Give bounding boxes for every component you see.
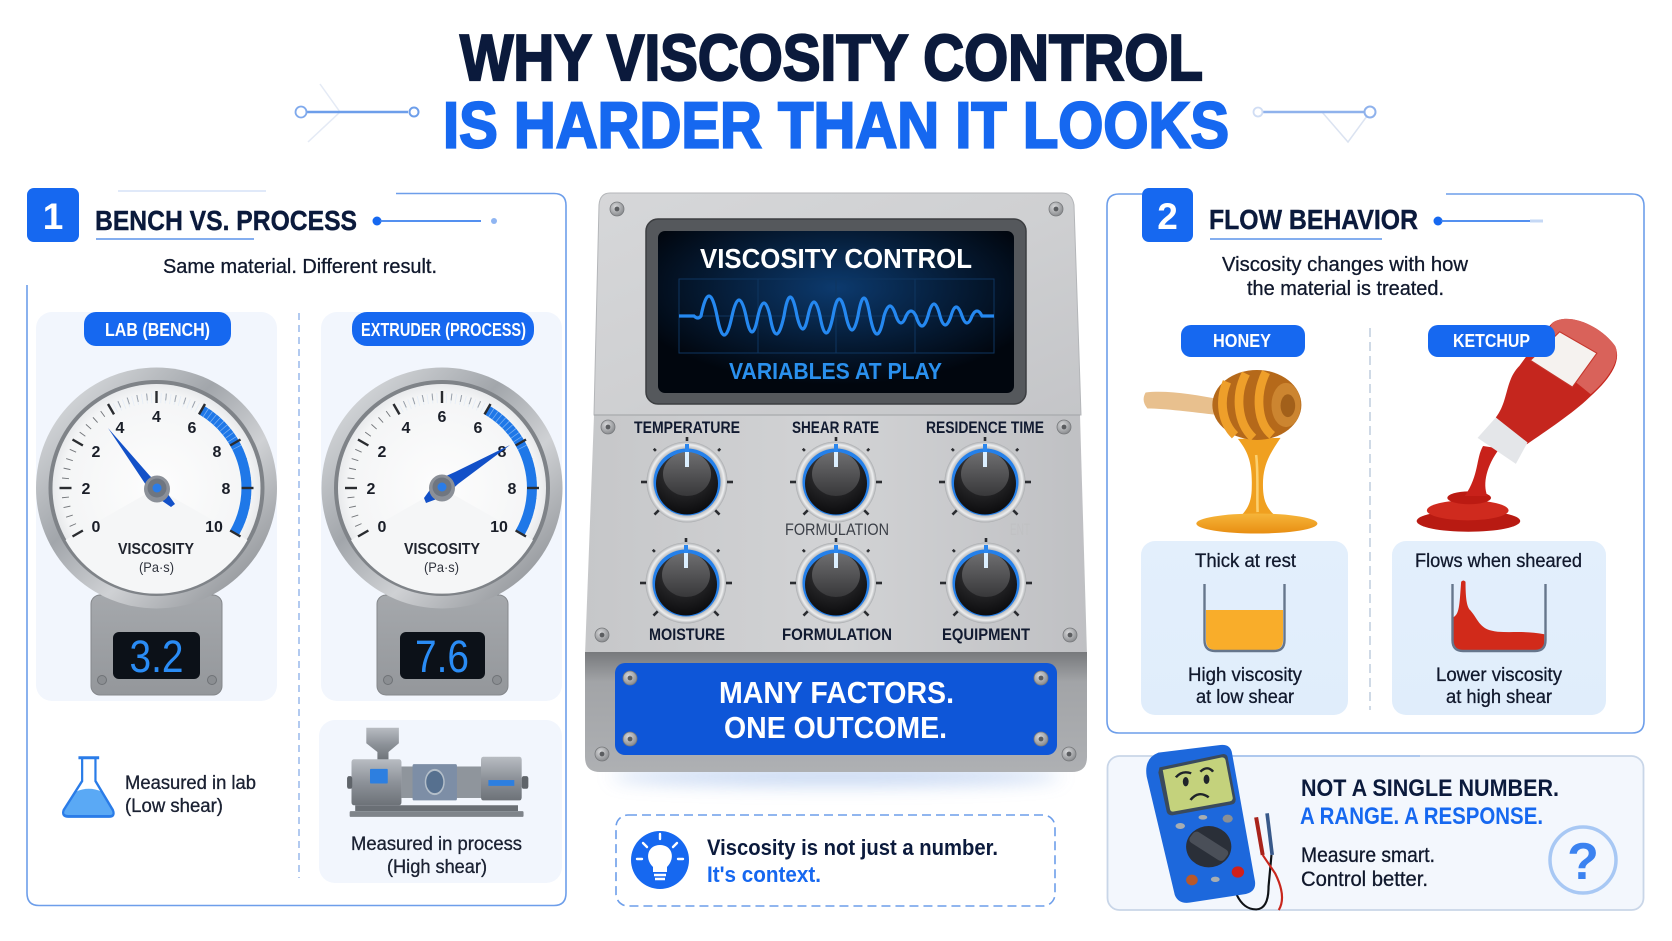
pill: ketchup	[1428, 325, 1555, 357]
heading: flow behavior	[1209, 204, 1543, 239]
knob labels: FORMULATION	[782, 625, 892, 644]
icon: honey dipper	[1144, 370, 1317, 534]
subtitle: Viscosity changes with how	[1222, 253, 1468, 276]
waveform	[679, 279, 994, 353]
title: IS HARDER THAN IT LOOKS	[443, 88, 1229, 162]
number badge 1	[27, 188, 79, 242]
gauge: extruder 7.6: 10	[490, 519, 508, 536]
text: measured in process	[351, 833, 522, 878]
knob labels: RESIDENCE TIME	[926, 418, 1044, 437]
display screen: VISCOSITY CONTROL	[700, 243, 972, 274]
card: ketchup lower viscosity: at high shear	[1446, 686, 1552, 708]
knob labels: FORMULATION	[785, 520, 889, 539]
gauge: extruder 7.6: 4	[402, 420, 411, 437]
callout text: It's context.	[707, 862, 821, 887]
text: measured in lab	[125, 772, 256, 817]
panel: flow behavior	[1107, 188, 1644, 733]
gauge: extruder 7.6	[319, 365, 565, 695]
gauge: lab 3.2: 0	[92, 519, 101, 536]
text: not a single number: NOT A SINGLE NUMBER.	[1301, 775, 1559, 802]
gauge: lab 3.2: 6	[188, 420, 197, 437]
number badge 2	[1142, 188, 1193, 242]
subtitle: the material is treated.	[1247, 277, 1444, 300]
pill: honey: HONEY	[1213, 331, 1271, 351]
pill: honey	[1181, 325, 1305, 357]
icon: question mark	[1550, 827, 1616, 893]
pill: lab	[84, 312, 231, 346]
text: not a single number: Control better.	[1301, 868, 1428, 891]
gauge: extruder 7.6: 8	[508, 481, 517, 498]
gauge: lab 3.2: 2	[82, 481, 91, 498]
card: extruder gauge	[319, 312, 565, 701]
gauge: extruder 7.6: (Pa·s)	[424, 559, 459, 575]
gauge: extruder 7.6: 8	[498, 444, 507, 461]
text: not a single number	[1300, 775, 1559, 891]
gauge: extruder 7.6: 0	[378, 519, 387, 536]
icon: light bulb	[631, 831, 689, 889]
gauge: lab 3.2	[34, 365, 279, 695]
blue plate: ONE OUTCOME.	[724, 710, 947, 745]
text: measured in process: Measured in process	[351, 833, 522, 855]
divider	[298, 313, 300, 878]
beaker: honey	[1204, 584, 1284, 651]
gauge: lab 3.2: 4	[152, 409, 161, 426]
gauge: lab 3.2: 2	[92, 444, 101, 461]
pill: extruder: EXTRUDER (PROCESS)	[361, 320, 526, 340]
icon: extruder	[347, 728, 528, 817]
subtitle	[1222, 253, 1468, 300]
card: lab gauge	[34, 312, 279, 701]
knob labels: ENT	[1010, 520, 1030, 539]
text: not a single number: A RANGE. A RESPONSE.	[1300, 803, 1543, 830]
gauge: lab 3.2: 8	[213, 444, 222, 461]
callout text	[707, 835, 998, 887]
pill: lab: LAB (BENCH)	[105, 320, 210, 340]
card: ketchup lower viscosity	[1392, 541, 1606, 715]
knob labels: SHEAR RATE	[792, 418, 879, 437]
beaker: ketchup	[1452, 580, 1546, 651]
text: not a single number: Measure smart.	[1301, 844, 1435, 867]
display screen: VARIABLES AT PLAY	[729, 358, 942, 384]
heading: flow behavior: FLOW BEHAVIOR	[1209, 204, 1418, 235]
knob labels: TEMPERATURE	[634, 418, 740, 437]
panel drop shadow	[611, 767, 1061, 785]
gauge: extruder 7.6: 7.6	[415, 631, 469, 682]
number badge 1: 1	[43, 196, 63, 237]
icon: ketchup bottle	[1417, 319, 1617, 532]
divider	[1369, 328, 1371, 710]
display screen	[646, 219, 1026, 404]
panel: bench vs process	[27, 188, 566, 906]
lower band	[585, 652, 1087, 772]
icon: sad multimeter	[1146, 745, 1282, 910]
gauge: extruder 7.6: 2	[367, 481, 376, 498]
upper housing	[594, 193, 1081, 415]
gauge: extruder 7.6: 2	[378, 444, 387, 461]
card: honey high viscosity: at low shear	[1196, 686, 1294, 708]
text: measured in process: (High shear)	[387, 856, 487, 878]
title decoration left	[296, 84, 418, 142]
pill: extruder	[352, 312, 534, 346]
knob labels: EQUIPMENT	[942, 625, 1031, 644]
card: ketchup lower viscosity: Flows when sheared	[1415, 550, 1582, 572]
blue plate	[615, 663, 1057, 755]
control panel	[585, 193, 1087, 785]
heading: bench vs process	[95, 205, 497, 239]
gauge: lab 3.2: VISCOSITY	[118, 541, 194, 558]
icon: question mark: ?	[1567, 833, 1599, 891]
title	[443, 21, 1229, 162]
subtitle: Same material. Different result.	[163, 255, 437, 278]
gauge: extruder 7.6: VISCOSITY	[404, 541, 480, 558]
number badge 2: 2	[1157, 196, 1178, 237]
text: measured in lab: Measured in lab	[125, 772, 256, 794]
blue plate: MANY FACTORS.	[719, 675, 954, 710]
card: ketchup lower viscosity: Lower viscosity	[1436, 664, 1562, 686]
icon: flask	[63, 758, 114, 816]
gauge: lab 3.2: (Pa·s)	[139, 559, 174, 575]
gauge: extruder 7.6: 6	[474, 420, 483, 437]
panel: not a single number	[1108, 745, 1644, 910]
gauge: lab 3.2: 8	[222, 481, 231, 498]
pill: ketchup: KETCHUP	[1453, 331, 1530, 351]
card: extruder machine	[319, 720, 562, 883]
knobs	[640, 437, 1032, 624]
knob section housing	[585, 415, 1087, 655]
card: honey high viscosity	[1141, 541, 1348, 715]
callout text: Viscosity is not just a number.	[707, 835, 998, 860]
title decoration right	[1254, 106, 1376, 142]
card: honey high viscosity: High viscosity	[1188, 664, 1302, 686]
knob labels: MOISTURE	[649, 625, 725, 644]
title: WHY VISCOSITY CONTROL	[460, 21, 1203, 94]
text: measured in lab: (Low shear)	[125, 795, 223, 817]
callout: context	[616, 815, 1055, 906]
knob labels	[634, 418, 1044, 644]
card: honey high viscosity: Thick at rest	[1195, 550, 1297, 572]
gauge: lab 3.2: 4	[116, 420, 125, 437]
gauge: lab 3.2: 10	[205, 519, 223, 536]
gauge: extruder 7.6: 6	[438, 409, 447, 426]
heading: bench vs process: BENCH VS. PROCESS	[95, 205, 357, 236]
gauge: lab 3.2: 3.2	[130, 631, 184, 682]
